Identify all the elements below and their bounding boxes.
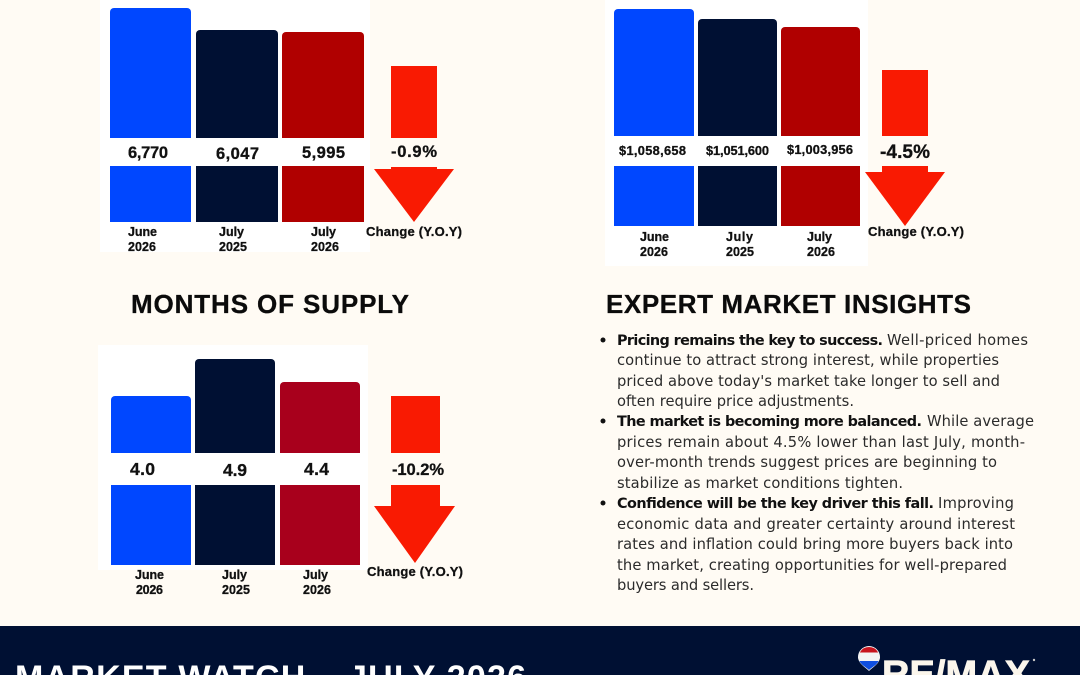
bar: July 2026 price xyxy=(781,27,860,136)
insight 3: confidence: Improving xyxy=(938,495,1014,512)
values: 6,770 xyxy=(128,144,168,162)
insight 3: confidence: economic data and greater certainty around interest xyxy=(617,516,1015,533)
values: 4.4 xyxy=(304,459,329,479)
lower band: July 2026 xyxy=(282,166,364,222)
values: 6,047 xyxy=(216,145,259,163)
insight 1: pricing: often require price adjustments. xyxy=(617,393,854,410)
lower band: June 2026 xyxy=(614,166,694,226)
lower band: June 2026 xyxy=(110,166,191,222)
period labels xyxy=(640,230,835,259)
change: price: Change (Y.O.Y) xyxy=(868,224,964,239)
values xyxy=(128,144,345,163)
period labels: 2025 xyxy=(219,240,247,254)
insight 2: balance: While average xyxy=(927,413,1034,430)
values: 5,995 xyxy=(302,144,345,162)
values xyxy=(619,142,853,158)
values: 4.0 xyxy=(130,459,155,479)
heading: months of supply: MONTHS OF SUPPLY xyxy=(131,289,409,319)
period labels: July xyxy=(222,568,247,582)
period labels xyxy=(128,225,339,254)
panel: sales chart xyxy=(100,0,370,254)
insight 2: balance: The market is becoming more balanced. xyxy=(617,414,922,430)
insight 2: balance: stabilize as market conditions tighten. xyxy=(617,475,903,492)
change: price: -4.5% xyxy=(880,142,930,163)
bar: June 2026 supply xyxy=(111,396,191,453)
period labels: June xyxy=(128,225,157,239)
lower band: July 2025 xyxy=(196,166,278,222)
values: 4.9 xyxy=(223,460,247,480)
insight 1: pricing: Well-priced homes xyxy=(887,332,1028,349)
bar: July 2025 sales xyxy=(196,30,278,138)
bar: July 2026 supply xyxy=(280,382,360,453)
lower band: July 2025 xyxy=(698,166,777,226)
footer band xyxy=(0,626,1080,675)
insight 2: balance: prices remain about 4.5% lower than last July, month- xyxy=(617,434,1025,451)
insight 1: pricing: continue to attract strong interest, while properties xyxy=(617,352,999,369)
period labels: July xyxy=(303,568,328,582)
period labels: 2025 xyxy=(726,245,754,259)
change: sales: -0.9% xyxy=(391,143,437,161)
arrow: sales change xyxy=(374,66,454,222)
change: price xyxy=(868,142,964,239)
bar: July 2025 price xyxy=(698,19,777,136)
period labels: July xyxy=(807,230,832,244)
panel: price chart xyxy=(605,0,868,266)
insight 2: balance: over-month trends suggest prices are beginning to xyxy=(617,454,997,471)
lower band: June 2026 xyxy=(111,485,191,565)
text block: insights list xyxy=(600,332,1034,594)
values: $1,003,956 xyxy=(787,142,853,157)
bar: July 2025 supply xyxy=(195,359,275,453)
insight 3: confidence: rates and inflation could bring more buyers back into xyxy=(617,536,1013,553)
heading: expert market insights: EXPERT MARKET INSIGHTS xyxy=(606,289,971,319)
insight 3: confidence: buyers and sellers. xyxy=(617,577,754,594)
insight 3: confidence xyxy=(600,495,1015,594)
period labels: 2026 xyxy=(640,245,668,259)
bar: June 2026 sales xyxy=(110,8,191,138)
icon: balloon logo xyxy=(858,646,880,671)
panel: months of supply chart xyxy=(98,345,368,597)
period labels: July xyxy=(726,230,753,244)
arrow: price change xyxy=(865,70,945,226)
lower band: July 2026 xyxy=(280,485,360,565)
period labels: 2026 xyxy=(303,583,331,597)
period labels: July xyxy=(219,225,244,239)
change: supply xyxy=(367,461,463,579)
values xyxy=(130,459,329,480)
period labels: 2026 xyxy=(311,240,339,254)
period labels: July xyxy=(311,225,336,239)
insight 3: confidence: Confidence will be the key driver this fall. xyxy=(617,496,934,512)
values: $1,051,600 xyxy=(706,143,769,158)
change: supply: -10.2% xyxy=(392,461,444,479)
period labels: June xyxy=(640,230,669,244)
bar: June 2026 price xyxy=(614,9,694,136)
lower band: July 2025 xyxy=(195,485,275,565)
logo registered mark xyxy=(1033,659,1035,661)
insight 3: confidence: the market, creating opportunities for well-prepared xyxy=(617,557,1007,574)
insight 2: balance xyxy=(600,413,1034,492)
change: sales xyxy=(366,143,462,239)
period labels: June xyxy=(135,568,164,582)
insight 1: pricing: priced above today's market take longer to sell and xyxy=(617,373,1000,390)
arrow: supply change xyxy=(374,396,455,563)
values: $1,058,658 xyxy=(619,143,686,158)
period labels: 2026 xyxy=(807,245,835,259)
change: sales: Change (Y.O.Y) xyxy=(366,224,462,239)
period labels: 2026 xyxy=(136,583,163,597)
change: supply: Change (Y.O.Y) xyxy=(367,564,463,579)
period labels: 2026 xyxy=(128,240,156,254)
bar: July 2026 sales xyxy=(282,32,364,138)
lower band: July 2026 xyxy=(781,166,860,226)
period labels: 2025 xyxy=(222,583,250,597)
period labels xyxy=(135,568,331,597)
insight 1: pricing: Pricing remains the key to success. xyxy=(617,333,883,349)
insight 1: pricing xyxy=(600,332,1028,410)
